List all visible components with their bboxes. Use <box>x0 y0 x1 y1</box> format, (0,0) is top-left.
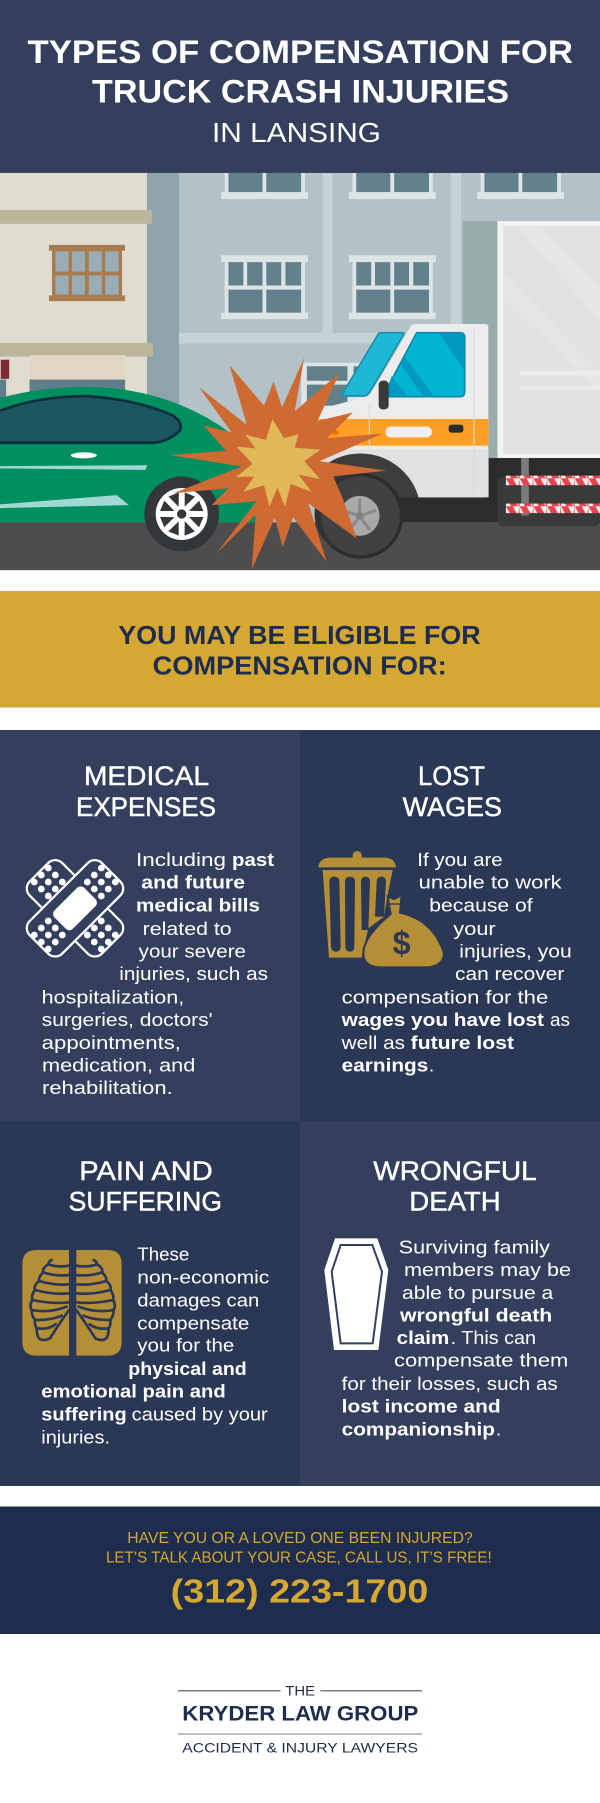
banner: eligibility heading <box>0 591 600 708</box>
body text: medical expenses: Including <box>136 849 226 870</box>
road <box>0 522 600 570</box>
body text: medical expenses: and future <box>141 872 245 893</box>
icon: trash can and money bag <box>318 851 444 967</box>
title <box>28 34 573 110</box>
body text: wrongful death: able to pursue a <box>402 1282 554 1303</box>
body text: wrongful death: compensate them <box>394 1350 568 1371</box>
header banner <box>0 0 600 173</box>
heading: lost wages <box>403 761 502 822</box>
banner: eligibility heading: YOU MAY BE ELIGIBLE FOR <box>118 620 481 650</box>
body text: wrongful death: Surviving family <box>399 1236 551 1257</box>
body text: lost wages: unable to work <box>419 872 563 893</box>
body text: wrongful death: for their losses, such as <box>342 1373 558 1394</box>
body text: wrongful death: companionship <box>342 1419 495 1440</box>
body text: pain and suffering <box>41 1244 269 1447</box>
logo: The Kryder Law Group: ACCIDENT & INJURY LAWYERS <box>182 1740 418 1756</box>
call to action text: LET’S TALK ABOUT YOUR CASE, CALL US, IT’S FREE! <box>106 1549 492 1566</box>
body text: medical expenses <box>42 849 274 1098</box>
logo: The Kryder Law Group: KRYDER LAW GROUP <box>182 1702 418 1726</box>
body text: wrongful death: . This can <box>451 1327 536 1348</box>
body text: lost wages: future lost <box>411 1032 514 1053</box>
truck front wheel and arch <box>302 453 494 559</box>
panel: lost wages <box>300 730 600 1121</box>
truck cab <box>317 324 488 497</box>
car front wheel <box>144 477 219 551</box>
body text: medical expenses: related to <box>143 918 232 939</box>
call to action text <box>106 1530 492 1566</box>
panel: pain and suffering <box>0 1121 300 1486</box>
subtitle: IN LANSING <box>212 117 381 148</box>
body text: lost wages: wages you have lost <box>341 1009 544 1030</box>
body text: wrongful death: wrongful death <box>399 1305 552 1326</box>
body text: wrongful death: members may be <box>404 1259 571 1280</box>
truck chassis and barrier <box>489 458 600 526</box>
body text: pain and suffering: non-economic <box>137 1266 269 1287</box>
body text: medical expenses: medical bills <box>136 895 260 916</box>
body text: medical expenses: appointments, <box>42 1032 181 1053</box>
left beige building <box>0 173 153 410</box>
heading: medical expenses: MEDICAL <box>84 761 209 791</box>
call to action text: HAVE YOU OR A LOVED ONE BEEN INJURED? <box>127 1530 473 1547</box>
body text: pain and suffering: damages can <box>137 1290 259 1311</box>
body text: pain and suffering: These <box>137 1244 189 1265</box>
body text: lost wages: . <box>429 1054 434 1075</box>
phone number: (312) 223-1700 <box>171 1573 428 1610</box>
heading: lost wages: LOST <box>418 761 485 791</box>
icon: coffin <box>324 1238 388 1350</box>
heading: medical expenses <box>76 761 216 822</box>
body text: medical expenses: rehabilitation. <box>42 1077 173 1098</box>
body text: lost wages: because of <box>429 895 534 916</box>
body text: pain and suffering: caused by your <box>132 1404 268 1425</box>
body text: medical expenses: past <box>232 849 274 870</box>
body text: lost wages: well as <box>341 1032 405 1053</box>
panel: wrongful death <box>300 1121 600 1486</box>
panel: medical expenses <box>0 730 300 1121</box>
icon: crossed bandages <box>23 856 127 961</box>
body text: medical expenses: hospitalization, <box>42 986 184 1007</box>
call to action banner <box>0 1506 600 1634</box>
body text: wrongful death: lost income and <box>342 1396 501 1417</box>
heading: pain and suffering: SUFFERING <box>69 1187 222 1217</box>
logo: The Kryder Law Group: THE <box>285 1684 315 1699</box>
body text: medical expenses: injuries, such as <box>119 963 268 984</box>
banner: eligibility heading: COMPENSATION FOR: <box>153 650 447 680</box>
body text: wrongful death <box>342 1236 571 1440</box>
body text: lost wages: If you are <box>417 849 503 870</box>
title: TYPES OF COMPENSATION FOR <box>28 34 573 70</box>
grey building facade and windows <box>179 173 564 412</box>
body text: lost wages: earnings <box>342 1054 428 1075</box>
illustration: truck and car crash street scene <box>0 173 600 570</box>
body text: pain and suffering: emotional pain and <box>41 1381 226 1402</box>
icon: trash can and money bag: $ <box>393 926 411 963</box>
body text: lost wages: compensation for the <box>342 986 548 1007</box>
body text: pain and suffering: you for the <box>137 1335 234 1356</box>
heading: pain and suffering: PAIN AND <box>79 1156 213 1186</box>
logo: The Kryder Law Group <box>178 1684 422 1756</box>
body text: medical expenses: surgeries, doctors' <box>42 1009 213 1030</box>
body text: medical expenses: medication, and <box>42 1054 195 1075</box>
body text: wrongful death: . <box>496 1419 501 1440</box>
title: TRUCK CRASH INJURIES <box>92 74 509 110</box>
explosion <box>170 358 386 569</box>
body text: pain and suffering: suffering <box>41 1404 127 1425</box>
body text: lost wages: injuries, you <box>459 940 572 961</box>
body text: pain and suffering: compensate <box>137 1312 249 1333</box>
street backdrop and buildings <box>0 173 600 570</box>
body text: lost wages <box>341 849 572 1075</box>
truck cargo box <box>463 221 600 462</box>
body text: lost wages: as <box>550 1009 570 1030</box>
body text: wrongful death: claim <box>397 1327 449 1348</box>
green car <box>0 387 264 522</box>
body text: lost wages: your <box>453 918 496 939</box>
icon: rib cage <box>22 1250 122 1356</box>
body text: pain and suffering: physical and <box>128 1358 247 1379</box>
body text: pain and suffering: injuries. <box>41 1426 110 1447</box>
heading: wrongful death <box>373 1156 537 1217</box>
heading: wrongful death: DEATH <box>409 1187 501 1217</box>
body text: medical expenses: your severe <box>139 940 246 961</box>
body text: lost wages: can recover <box>455 963 564 984</box>
heading: medical expenses: EXPENSES <box>76 792 216 822</box>
heading: pain and suffering <box>69 1156 222 1217</box>
heading: wrongful death: WRONGFUL <box>373 1156 537 1186</box>
heading: lost wages: WAGES <box>403 792 502 822</box>
